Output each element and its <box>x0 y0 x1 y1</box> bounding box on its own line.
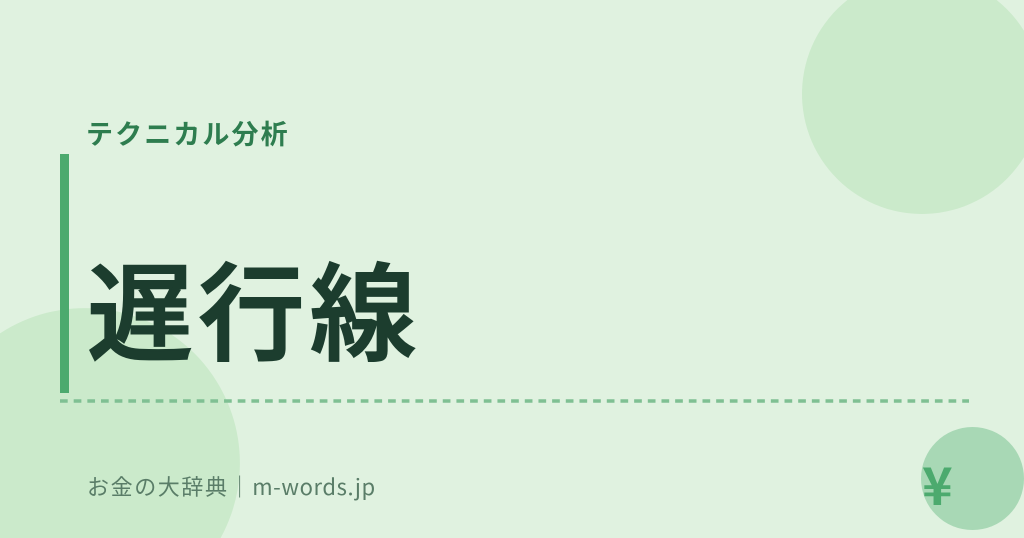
accent bar <box>60 154 69 393</box>
category label: テクニカル分析 <box>86 113 290 152</box>
dashed divider <box>60 399 969 403</box>
main title: 遅行線 <box>87 229 422 383</box>
decorative circle: bottom right <box>921 427 1024 530</box>
icon: yen symbol: ¥ <box>922 445 953 520</box>
decorative circle: bottom left <box>0 308 240 538</box>
decorative circle: top right <box>802 0 1024 214</box>
footer: site name: お金の大辞典｜m-words.jp <box>87 470 376 502</box>
